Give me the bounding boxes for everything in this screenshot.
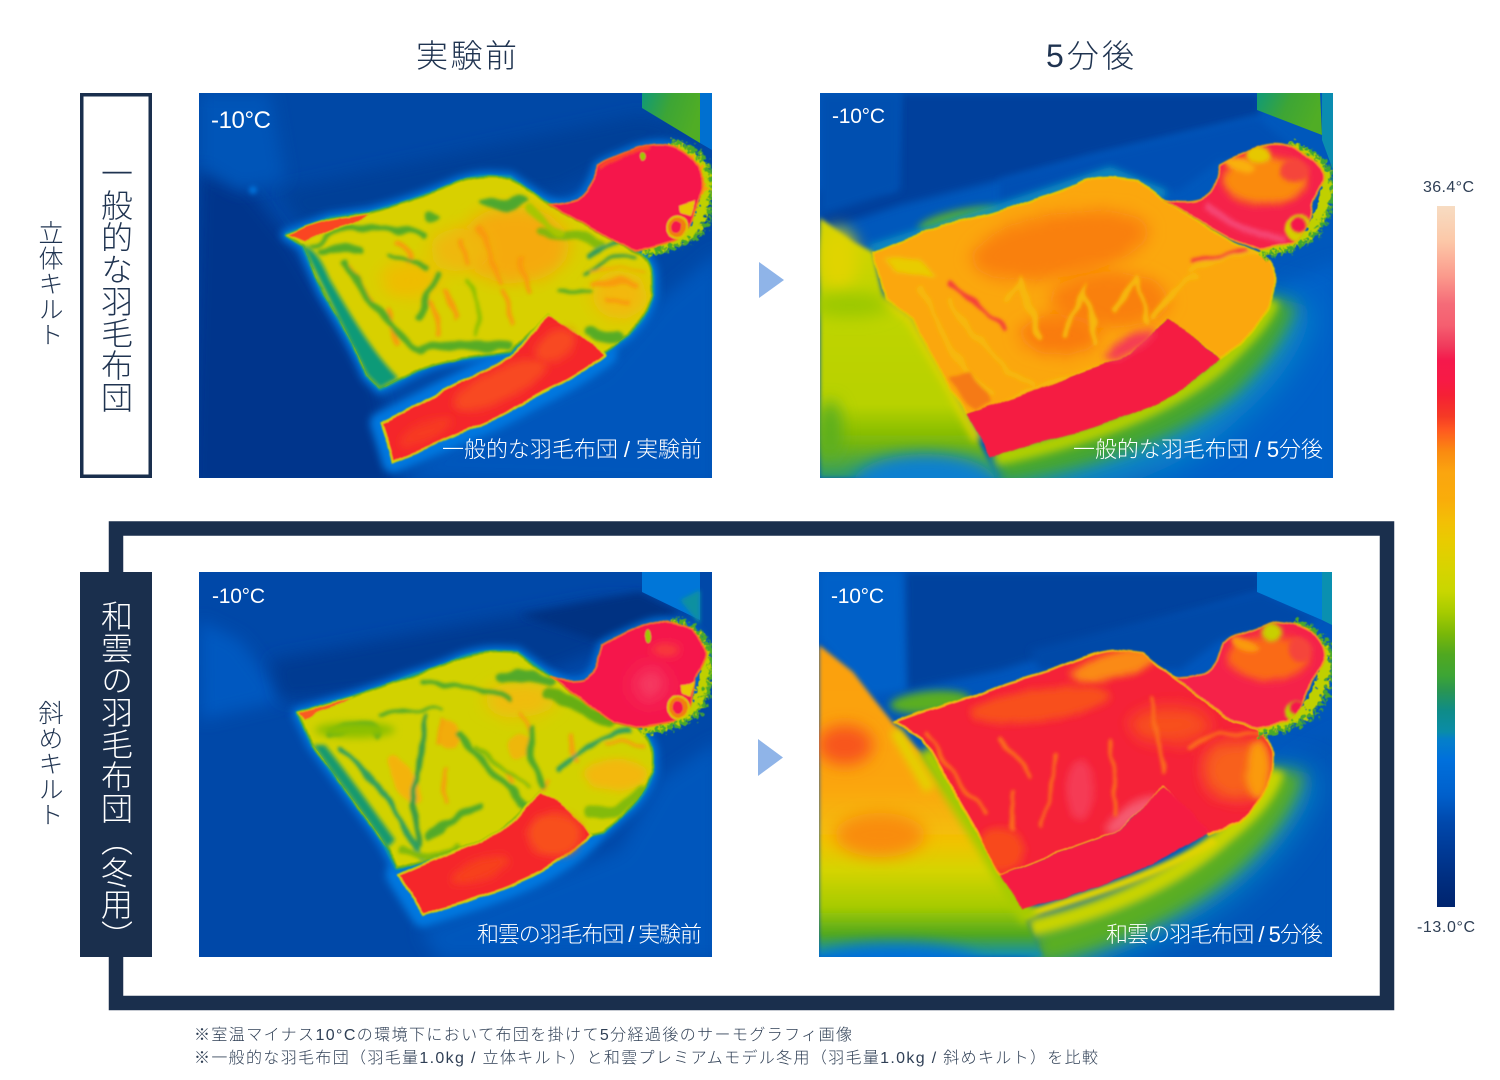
- window wedge: [642, 93, 700, 143]
- window wedge: [642, 572, 700, 620]
- shirt: [895, 641, 1273, 875]
- arrow: wagumo row: [758, 739, 783, 776]
- panel: standard duvet before: [190, 93, 720, 490]
- panel: standard duvet after five minutes: [820, 93, 1333, 478]
- row label: wagumo duvet: [80, 572, 152, 957]
- temperature colour scale: -13.0°C: [1417, 919, 1475, 936]
- temperature colour scale: [1417, 179, 1475, 936]
- temperature colour scale: 36.4°C: [1423, 179, 1474, 196]
- row label: standard duvet: 一般的な羽毛布団: [97, 157, 133, 413]
- column heading: after five minutes: 5分後: [1046, 38, 1134, 74]
- arm: [967, 318, 1220, 457]
- bottom-left pillow tip: [298, 697, 353, 720]
- row sublabel: diagonal quilt: 斜めキルト: [35, 700, 64, 828]
- head: [1173, 622, 1325, 728]
- bottom-left pillow tip: [287, 213, 370, 242]
- row label: wagumo duvet: 和雲の羽毛布団（冬用）: [97, 600, 133, 952]
- window wedge: [1257, 572, 1322, 620]
- warmed bed glow: [889, 688, 1295, 955]
- duvet in foreground: [819, 643, 1044, 957]
- image caption: 一般的な羽毛布団 / 5分後: [1073, 437, 1323, 462]
- hair: [1260, 144, 1334, 256]
- column heading: before the experiment: 実験前: [416, 38, 517, 74]
- shirt: [298, 652, 652, 868]
- body heat glow: [298, 622, 706, 915]
- window wedge: [1257, 93, 1322, 135]
- shirt folds: [313, 674, 645, 860]
- head: [550, 144, 704, 250]
- label: temperature: -10°C: [211, 107, 271, 134]
- panel: wagumo duvet after five minutes: [819, 572, 1332, 957]
- footnotes: ※一般的な羽毛布団（羽毛量1.0kg / 立体キルト）と和雲プレミアムモデル冬用（羽毛量1.0kg / 斜めキルト）を比較: [194, 1049, 1098, 1067]
- label: temperature: -10°C: [212, 585, 265, 608]
- shirt: [873, 177, 1275, 415]
- body heat glow: [287, 144, 704, 462]
- label: temperature: -10°C: [832, 105, 885, 128]
- footnotes: [194, 1026, 1098, 1067]
- row label: standard duvet: [82, 95, 150, 476]
- arrow: standard row: [759, 262, 784, 298]
- shirt folds: [920, 250, 1262, 412]
- panel: wagumo duvet before: [199, 572, 720, 960]
- hair: [642, 142, 713, 253]
- hair: [642, 620, 713, 733]
- image caption: 和雲の羽毛布団 / 実験前: [477, 922, 702, 947]
- shirt: [287, 177, 652, 388]
- arm: [1000, 788, 1208, 910]
- image caption: 一般的な羽毛布団 / 実験前: [442, 437, 702, 462]
- arm: [398, 792, 590, 915]
- image caption: 和雲の羽毛布団 / 5分後: [1106, 922, 1323, 947]
- hair: [1258, 622, 1333, 735]
- duvet in foreground: [820, 216, 1006, 478]
- footnotes: ※室温マイナス10°Cの環境下において布団を掛けて5分経過後のサーモグラフィ画像: [194, 1026, 852, 1044]
- label: temperature: -10°C: [831, 585, 884, 608]
- head: [550, 622, 706, 728]
- warmed bed glow: [870, 172, 1285, 475]
- row sublabel: box quilt: 立体キルト: [35, 220, 64, 348]
- outer highlight frame around the wagumo row: [116, 528, 1387, 1003]
- shirt folds: [303, 197, 645, 388]
- arm: [381, 315, 606, 462]
- shirt folds: [925, 700, 1265, 830]
- head: [1163, 144, 1324, 250]
